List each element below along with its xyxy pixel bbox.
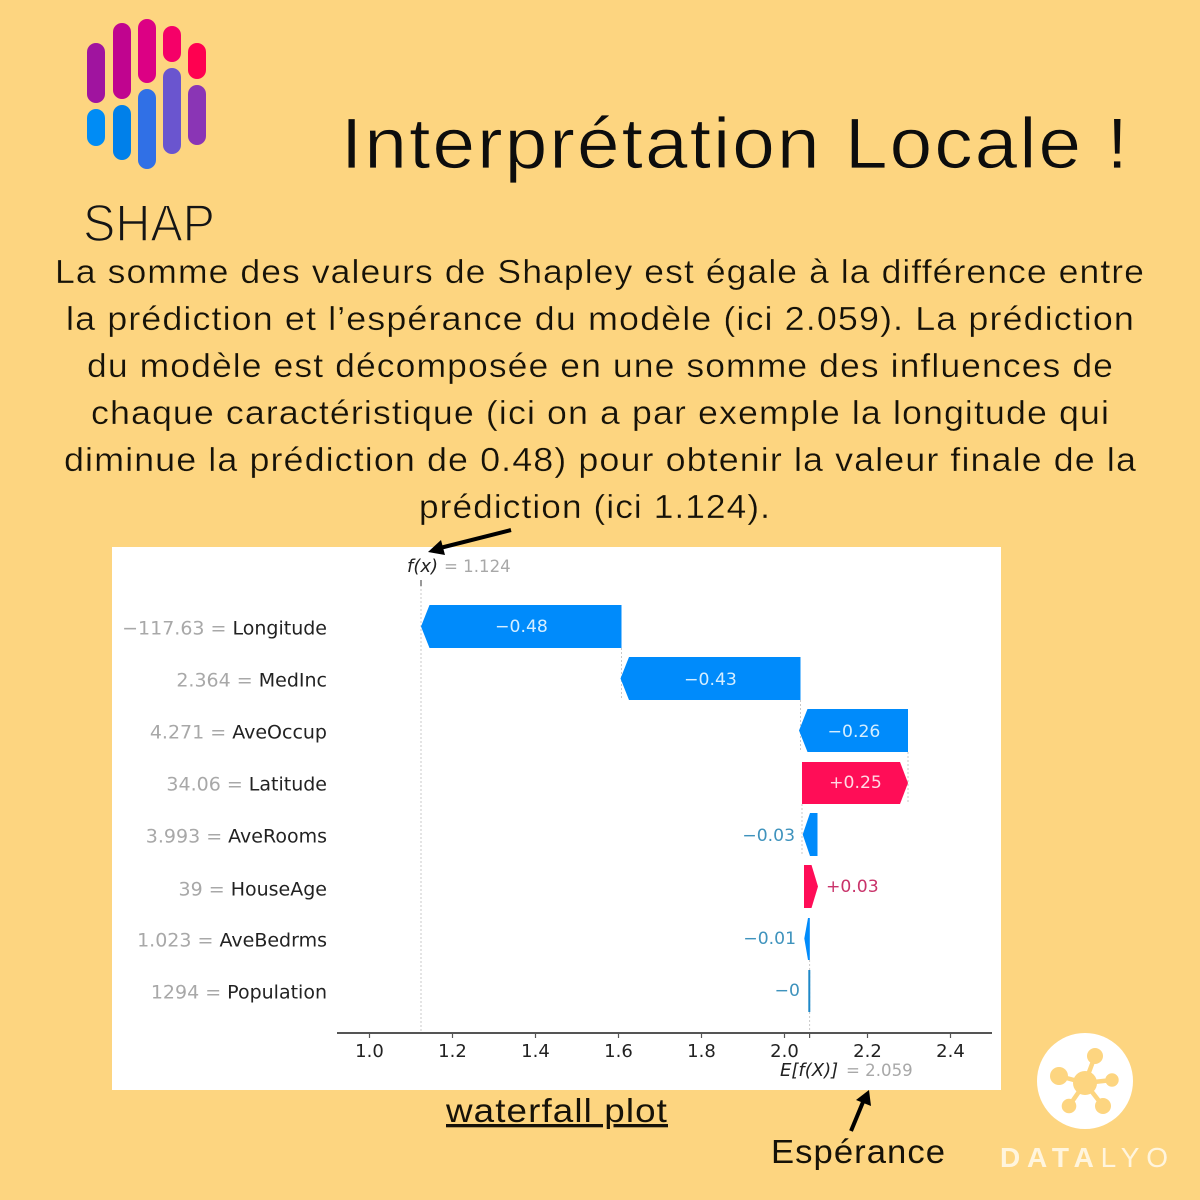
text block: explanation paragraph: chaque caractéristique (ici on a par exemple la longitude qui bbox=[91, 394, 1110, 431]
bar: HouseAge +0.03 bbox=[804, 865, 818, 908]
text block: explanation paragraph: prédiction (ici 1.124). bbox=[419, 488, 771, 525]
bar: Latitude +0.25 bbox=[802, 762, 908, 804]
bar value: -0.48: −0.48 bbox=[495, 617, 548, 637]
bar value: +0.25: +0.25 bbox=[829, 773, 882, 793]
caption: waterfall plot: waterfall plot bbox=[445, 1092, 668, 1129]
bar value: +0.03: +0.03 bbox=[826, 877, 879, 897]
x axis: 1.4 bbox=[521, 1041, 550, 1062]
feature label: Longitude: −117.63 = Longitude bbox=[122, 618, 327, 640]
text block: explanation paragraph: du modèle est décomposée en une somme des influences de bbox=[87, 347, 1114, 384]
feature label: AveOccup: 4.271 = AveOccup bbox=[150, 722, 327, 744]
feature label: MedInc: 2.364 = MedInc bbox=[176, 670, 327, 692]
x axis: 2.2 bbox=[853, 1041, 882, 1062]
x axis: 2.4 bbox=[936, 1041, 965, 1062]
f(x) label: = 1.124 bbox=[444, 557, 511, 576]
bar value: -0: −0 bbox=[775, 981, 800, 1001]
x axis: 1.6 bbox=[604, 1041, 633, 1062]
feature label: Latitude: 34.06 = Latitude bbox=[166, 774, 327, 796]
E[f(X)] label: = 2.059 bbox=[846, 1061, 913, 1080]
x axis bbox=[337, 1033, 992, 1062]
feature label: Population: 1294 = Population bbox=[151, 982, 327, 1004]
x axis: 1.8 bbox=[687, 1041, 716, 1062]
bar value: -0.26: −0.26 bbox=[828, 722, 880, 742]
f(x) tick bbox=[420, 580, 422, 586]
text block: explanation paragraph: la prédiction et l’espérance du modèle (ici 2.059). La prédiction bbox=[66, 300, 1135, 337]
logo wordmark: SHAP: SHAP bbox=[83, 195, 215, 253]
bar value: -0.43: −0.43 bbox=[684, 670, 737, 690]
bar: AveOccup -0.26 bbox=[799, 709, 908, 752]
chart guide lines bbox=[421, 585, 908, 1033]
label: Espérance: Espérance bbox=[771, 1133, 946, 1170]
icon: SHAP logo bars bbox=[87, 19, 206, 169]
feature label: AveBedrms: 1.023 = AveBedrms bbox=[137, 930, 327, 952]
bar value: -0.03: −0.03 bbox=[742, 826, 795, 846]
bar: MedInc -0.43 bbox=[620, 657, 800, 700]
x axis: 1.2 bbox=[438, 1041, 467, 1062]
bar: AveBedrms -0.01 bbox=[804, 918, 810, 960]
bar: Longitude -0.48 bbox=[421, 605, 622, 648]
text block: explanation paragraph bbox=[55, 253, 1145, 525]
feature label: AveRooms: 3.993 = AveRooms bbox=[146, 826, 327, 848]
bar value: -0.01: −0.01 bbox=[743, 929, 796, 949]
arrow: to expectation bbox=[851, 1090, 871, 1131]
x axis: 1.0 bbox=[355, 1041, 384, 1062]
bar: Population -0 bbox=[808, 970, 810, 1012]
logo wordmark: DATALYO: DATALYO bbox=[1000, 1142, 1168, 1173]
text block: explanation paragraph: La somme des valeurs de Shapley est égale à la différence entre bbox=[55, 253, 1145, 290]
E[f(X)] label: E[f(X)] bbox=[780, 1060, 838, 1081]
bar: AveRooms -0.03 bbox=[803, 813, 818, 856]
title: Interprétation Locale ! bbox=[341, 105, 1130, 184]
panel: waterfall chart bbox=[112, 547, 1001, 1090]
x axis: 2.0 bbox=[770, 1041, 799, 1062]
text block: explanation paragraph: diminue la prédiction de 0.48) pour obtenir la valeur finale de la bbox=[64, 441, 1137, 478]
icon: Datalyo network logo bbox=[1037, 1033, 1133, 1129]
f(x) label: f(x) bbox=[407, 556, 438, 577]
feature label: HouseAge: 39 = HouseAge bbox=[179, 878, 327, 900]
arrow: to f(x) bbox=[428, 530, 511, 555]
